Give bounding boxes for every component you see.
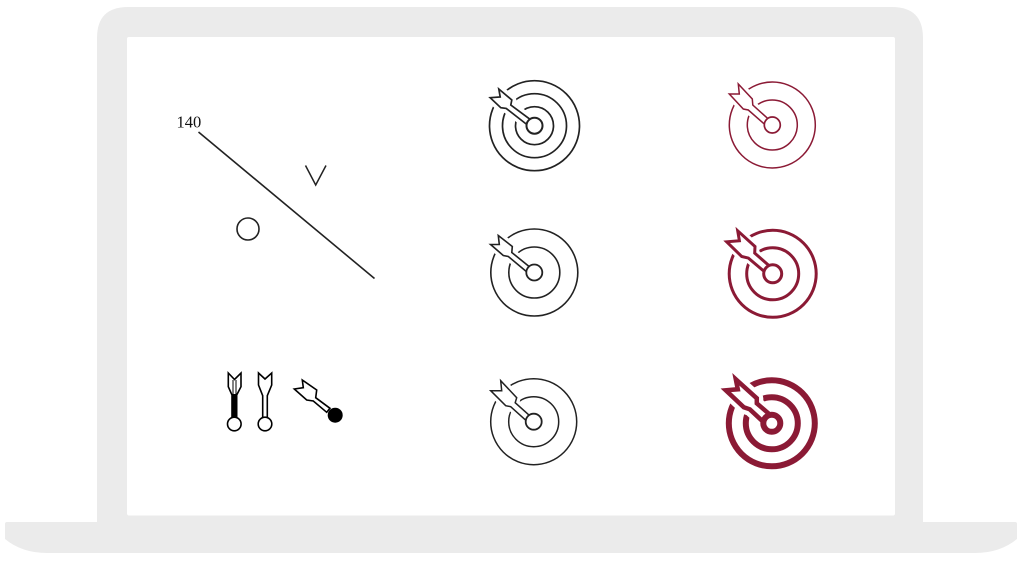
dart gap (491, 236, 530, 272)
dart gap (491, 381, 530, 420)
bullseye (526, 264, 542, 280)
bullseye (763, 415, 780, 432)
dart gap (490, 89, 530, 124)
target: black four rings (490, 81, 580, 171)
laptop lid (97, 7, 923, 523)
bullseye (526, 414, 542, 430)
rings (729, 82, 815, 168)
bullseye (764, 265, 782, 283)
dart (727, 231, 770, 272)
dart (491, 381, 530, 420)
dart gap (729, 84, 768, 124)
bullseye (764, 117, 780, 133)
diagonal line (198, 132, 374, 278)
dart (729, 84, 768, 124)
target: red medium (727, 230, 816, 317)
dart (491, 236, 530, 272)
rings (491, 379, 577, 465)
target: red thin (729, 82, 815, 168)
rings (491, 229, 578, 316)
laptop base (5, 522, 1017, 553)
sketch elements (176, 112, 374, 278)
bullseye (526, 118, 542, 134)
laptop screen (127, 37, 895, 516)
dart with thick shaft (228, 373, 241, 431)
rings (729, 380, 815, 466)
label 140: 140 (176, 112, 201, 132)
dart (490, 89, 530, 124)
dart (726, 379, 772, 423)
target: black thin with long fletching (491, 379, 577, 465)
target: black three rings (491, 229, 578, 316)
dart with solid target (294, 380, 343, 423)
rings (490, 81, 580, 171)
small dart parts (228, 373, 343, 431)
dart gap (727, 231, 770, 272)
rings (729, 230, 816, 317)
target: red bold (726, 379, 815, 466)
dart gap (726, 379, 772, 423)
dart with hollow shaft (258, 373, 272, 431)
circle glyph (237, 218, 259, 240)
V glyph (306, 166, 326, 185)
